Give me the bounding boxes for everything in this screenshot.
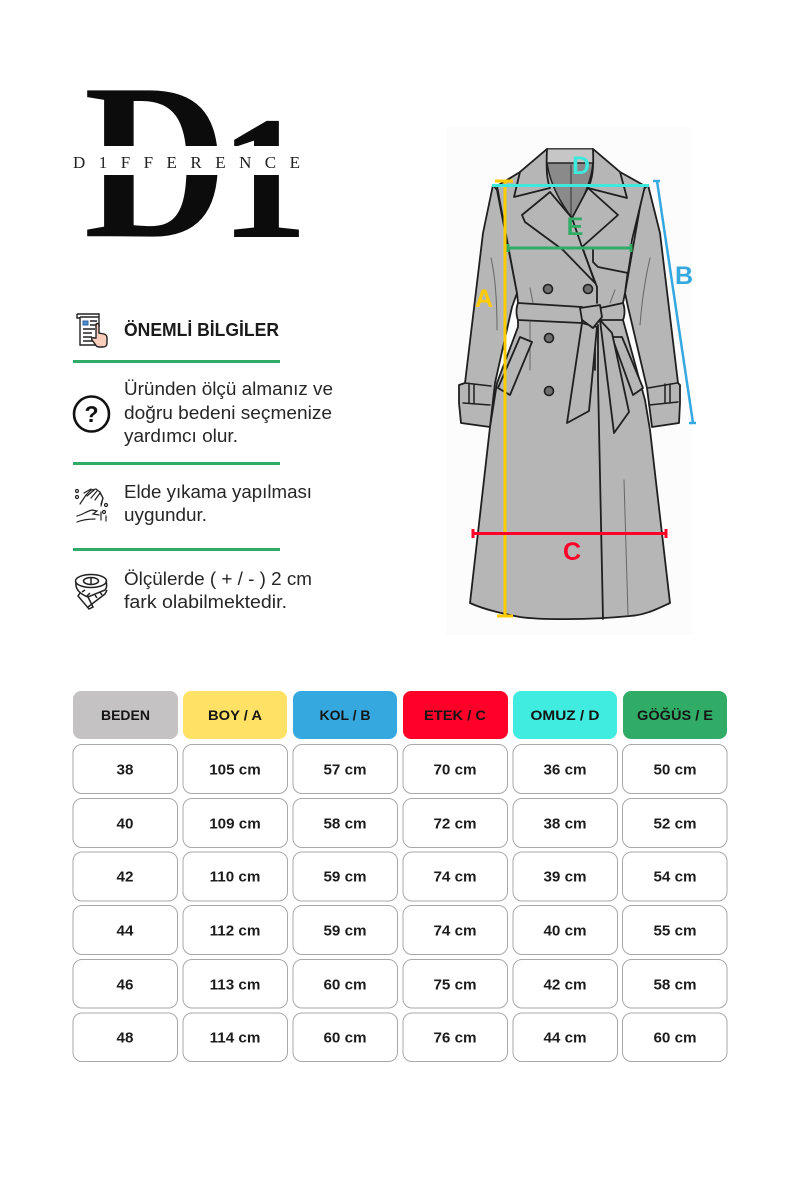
row: size 42: 39 cm — [543, 868, 587, 886]
table header row: KOL / B — [319, 707, 371, 723]
row: size 46: 75 cm — [433, 976, 477, 994]
text block: tolerance — [124, 568, 312, 612]
row: size 44: 44 — [117, 922, 134, 940]
text block: tolerance: fark olabilmektedir. — [124, 591, 287, 612]
row: size 38 — [73, 744, 727, 794]
measure A: length: A — [475, 285, 493, 313]
row: size 44: 55 cm — [653, 922, 697, 940]
row: size 42: 42 — [117, 868, 133, 886]
coat illustration panel — [446, 127, 692, 635]
logo: D1 Difference: 1 — [220, 81, 308, 276]
measure E: chest: E — [567, 213, 583, 241]
measure B: sleeve: B — [675, 262, 693, 290]
icon: info document with pointing hand — [77, 314, 107, 347]
measure C: hem: C — [563, 538, 581, 566]
heading: important information: ÖNEMLİ BİLGİLER — [124, 320, 279, 340]
divider two — [73, 462, 280, 465]
neck interior — [547, 149, 593, 163]
row: size 48: 60 cm — [653, 1030, 697, 1046]
row: size 48: 48 — [117, 1030, 133, 1046]
belt — [516, 303, 629, 433]
collar — [514, 149, 627, 283]
logo: D1 Difference — [70, 38, 308, 287]
row: size 40 — [73, 798, 727, 848]
measure A: length — [475, 181, 513, 616]
row: size 46: 46 — [117, 976, 133, 994]
row: size 46: 58 cm — [653, 976, 697, 994]
row: size 44: 40 cm — [543, 922, 587, 940]
row: size 42: 110 cm — [210, 868, 260, 886]
cuff details — [463, 383, 678, 405]
size table — [73, 691, 727, 1062]
storm flap — [593, 248, 632, 273]
row: size 38: 38 — [117, 762, 133, 778]
logo: D1 Difference: D — [83, 38, 228, 287]
row: size 42 — [73, 852, 727, 901]
icon: question mark — [74, 396, 109, 432]
text block: hand wash — [124, 481, 312, 525]
row: size 48 — [73, 1013, 727, 1062]
row: size 46: 113 cm — [210, 976, 260, 994]
text block: hand wash: Elde yıkama yapılması — [124, 481, 312, 502]
row: size 40: 72 cm — [433, 816, 477, 832]
text block: hand wash: uygundur. — [124, 504, 207, 525]
row: size 48: 60 cm — [323, 1030, 367, 1046]
table header row: OMUZ / D — [530, 707, 600, 723]
lapels — [522, 192, 595, 283]
row: size 48: 44 cm — [543, 1030, 587, 1046]
row: size 46: 42 cm — [543, 976, 587, 994]
row: size 44: 112 cm — [210, 922, 260, 940]
row: size 38: 57 cm — [323, 762, 367, 778]
row: size 40: 38 cm — [543, 816, 587, 832]
row: size 38: 105 cm — [209, 762, 261, 778]
row: size 42: 54 cm — [653, 868, 697, 886]
icon: washing hands — [76, 489, 108, 522]
row: size 48: 76 cm — [433, 1030, 477, 1046]
row: size 38: 36 cm — [543, 762, 587, 778]
measure E: chest — [508, 213, 631, 252]
divider one — [73, 360, 280, 363]
row: size 40: 58 cm — [323, 816, 367, 832]
row: size 46 — [73, 960, 727, 1008]
text block: measurement help: yardımcı olur. — [124, 425, 238, 446]
row: size 48: 114 cm — [210, 1030, 260, 1046]
measure D: shoulder: D — [572, 152, 590, 180]
pockets — [498, 337, 532, 395]
row: size 42: 74 cm — [433, 868, 477, 886]
row: size 44 — [73, 906, 727, 954]
icon: question mark: ? — [84, 401, 99, 427]
row: size 40: 109 cm — [209, 816, 261, 832]
row: size 42: 59 cm — [323, 868, 367, 886]
table header row: BEDEN — [101, 707, 150, 723]
row: size 38: 50 cm — [653, 762, 697, 778]
front opening — [582, 247, 603, 619]
text block: measurement help — [124, 378, 333, 446]
divider three — [73, 548, 280, 551]
row: size 40: 52 cm — [653, 816, 697, 832]
measure B: sleeve — [653, 181, 696, 423]
buttons — [544, 284, 592, 396]
table header row — [73, 691, 727, 739]
row: size 40: 40 — [117, 816, 133, 832]
row: size 44: 74 cm — [433, 922, 477, 940]
table header row: ETEK / C — [424, 707, 486, 723]
table header row: BOY / A — [208, 707, 262, 723]
text block: tolerance: Ölçülerde ( + / - ) 2 cm — [124, 568, 312, 589]
row: size 38: 70 cm — [433, 762, 477, 778]
icon: measuring tape — [76, 574, 107, 609]
text block: measurement help: Üründen ölçü almanız ve — [124, 378, 333, 399]
seams — [491, 258, 650, 615]
measure C: hem — [473, 529, 666, 566]
coat body silhouette — [459, 149, 680, 619]
row: size 44: 59 cm — [323, 922, 367, 940]
row: size 46: 60 cm — [323, 976, 367, 994]
table header row: GÖĞÜS / E — [637, 706, 713, 723]
logo: D1 Difference: D1FFERENCE — [73, 153, 300, 172]
text block: measurement help: doğru bedeni seçmenize — [124, 402, 332, 423]
